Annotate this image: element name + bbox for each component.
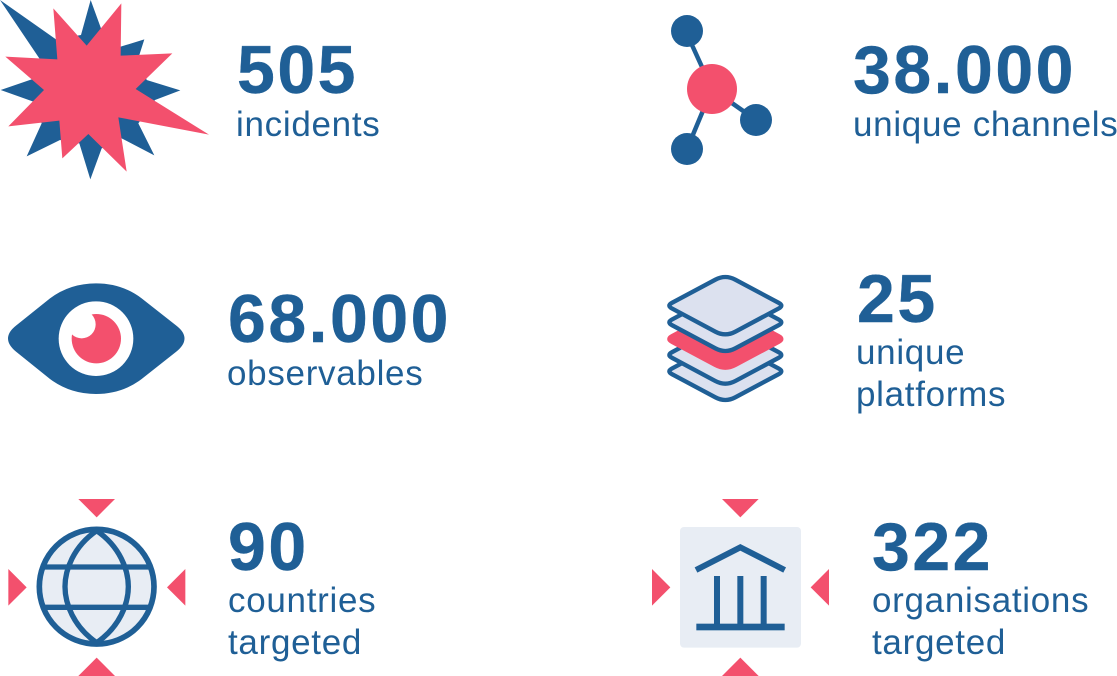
- stat: 90 countries targeted: [228, 509, 376, 662]
- stat: 322 organisations targeted: organisations: [872, 581, 1089, 620]
- stat: 25 unique platforms: platforms: [856, 375, 1006, 414]
- stat: 38.000 unique channels: unique channels: [853, 105, 1117, 144]
- icon: eye: [8, 283, 184, 394]
- stat: 68.000 observables: observables: [227, 354, 423, 393]
- stat: 25 unique platforms: unique: [856, 333, 965, 372]
- stat: 505 incidents: incidents: [236, 105, 380, 144]
- stat: 505 incidents: [236, 32, 380, 144]
- icon: globe with arrows: [8, 499, 185, 676]
- stat: 38.000 unique channels: 38.000: [853, 32, 1076, 108]
- stat: 322 organisations targeted: targeted: [872, 623, 1006, 662]
- stat: 68.000 observables: 68.000: [228, 281, 451, 357]
- stat: 38.000 unique channels: [853, 32, 1117, 144]
- stat: 90 countries targeted: targeted: [228, 623, 362, 662]
- stat: 90 countries targeted: 90: [228, 509, 309, 585]
- stat: 25 unique platforms: [856, 261, 1006, 414]
- icon: stacked layers: [669, 277, 781, 400]
- stat: 68.000 observables: [227, 281, 451, 393]
- stat: 322 organisations targeted: [872, 509, 1089, 662]
- stat: 25 unique platforms: 25: [857, 261, 938, 337]
- icon: network nodes: [671, 15, 772, 165]
- icon: institution building with arrows: [652, 499, 829, 676]
- icon: explosion burst: [0, 0, 209, 179]
- stat: 322 organisations targeted: 322: [872, 509, 993, 585]
- stat: 90 countries targeted: countries: [228, 581, 376, 620]
- stat: 505 incidents: 505: [237, 32, 358, 108]
